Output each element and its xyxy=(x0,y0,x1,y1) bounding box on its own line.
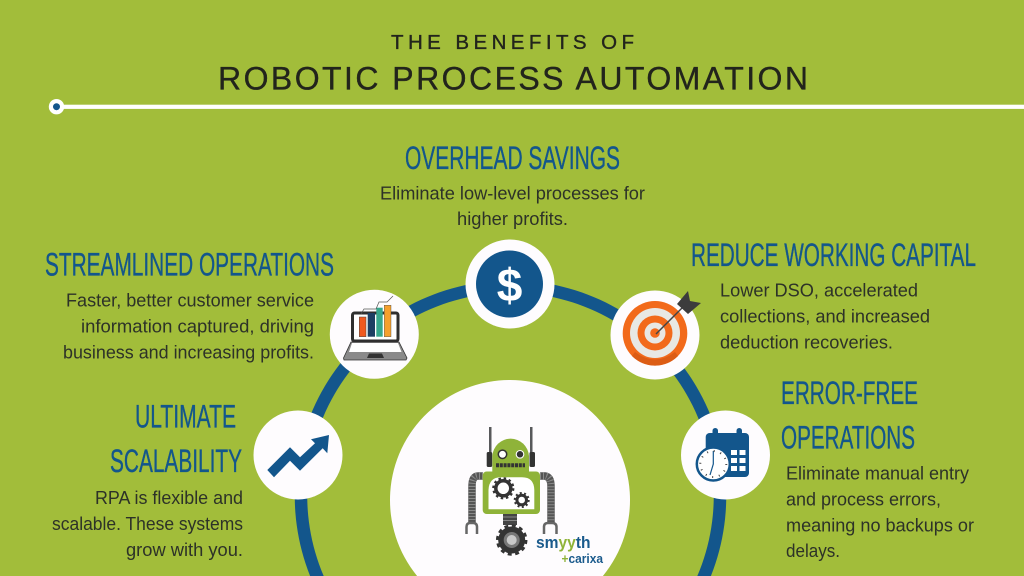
icon: dollar: $ xyxy=(497,259,522,311)
icon: calendar and clock xyxy=(681,410,770,500)
text block: scalable. These systems xyxy=(52,514,243,534)
text block: Eliminate low-level processes for xyxy=(380,184,645,204)
text block: and process errors, xyxy=(786,489,941,509)
central robot panel xyxy=(390,380,630,576)
panel: reduce working capital xyxy=(610,237,976,380)
text block: deduction recoveries. xyxy=(720,332,893,352)
title: THE BENEFITS OF xyxy=(391,31,634,54)
text block xyxy=(720,281,930,352)
panel: streamlined operations xyxy=(45,246,419,379)
text block: Faster, better customer service xyxy=(66,291,314,311)
text block: higher profits. xyxy=(457,209,568,229)
text block: meaning no backups or xyxy=(786,515,974,535)
heading xyxy=(110,398,242,479)
icon: robot xyxy=(466,427,556,554)
heading xyxy=(781,375,918,456)
header divider with dot xyxy=(49,99,1024,114)
heading: SCALABILITY xyxy=(110,443,242,479)
logo: smyyth + carixa: +carixa xyxy=(562,552,604,566)
text block: grow with you. xyxy=(126,540,243,560)
logo: smyyth + carixa xyxy=(536,533,604,566)
icon: trend arrow xyxy=(254,410,342,500)
text block xyxy=(786,463,974,561)
title: ROBOTIC PROCESS AUTOMATION xyxy=(218,60,808,96)
text block xyxy=(380,184,645,229)
icon: dollar xyxy=(466,240,554,328)
logo: smyyth + carixa: smyyth xyxy=(536,533,590,552)
text block: collections, and increased xyxy=(720,306,930,326)
panel: overhead savings xyxy=(380,140,645,328)
heading: ULTIMATE xyxy=(135,398,236,434)
heading: OVERHEAD SAVINGS xyxy=(405,140,620,176)
heading: ERROR-FREE xyxy=(781,375,918,411)
text block: business and increasing profits. xyxy=(63,343,314,363)
icon: laptop chart xyxy=(330,290,419,379)
text block: Lower DSO, accelerated xyxy=(720,281,918,301)
text block xyxy=(52,488,243,560)
heading: OPERATIONS xyxy=(781,420,915,456)
text block: delays. xyxy=(786,541,840,561)
text block: Eliminate manual entry xyxy=(786,463,969,483)
text block: information captured, driving xyxy=(81,317,314,337)
panel: error-free operations xyxy=(681,375,974,561)
icon: target with dart xyxy=(610,290,701,380)
heading: STREAMLINED OPERATIONS xyxy=(45,246,334,282)
panel: ultimate scalability xyxy=(52,398,342,560)
title xyxy=(218,31,808,96)
text block: RPA is flexible and xyxy=(95,488,243,508)
connecting ring xyxy=(295,280,726,576)
text block xyxy=(63,291,314,363)
